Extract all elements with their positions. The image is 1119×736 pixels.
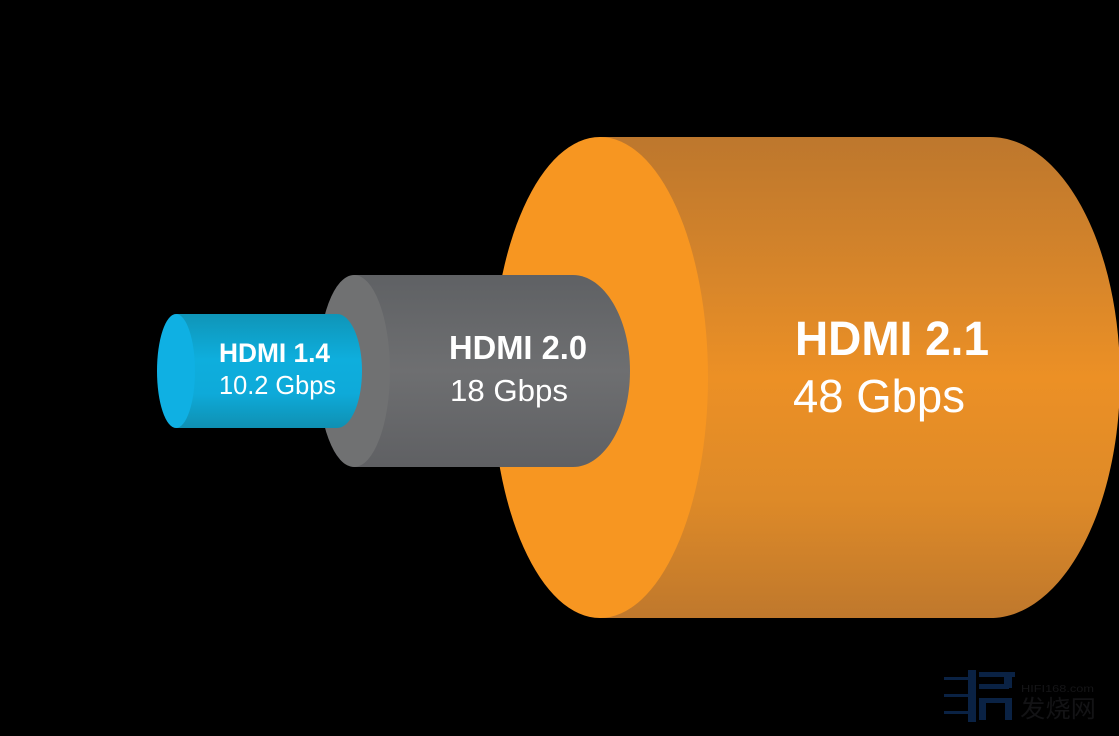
- cylinder: HDMI 1.4: [157, 314, 362, 428]
- label: 48 Gbps: 48 Gbps: [793, 370, 965, 422]
- label: HDMI 1.4: HDMI 1.4: [219, 338, 330, 368]
- label: HDMI 2.1: HDMI 2.1: [795, 313, 989, 366]
- cylinder: HDMI 2.1: [492, 137, 1119, 618]
- cylinder: HDMI 2.0: [318, 275, 630, 467]
- label: 10.2 Gbps: 10.2 Gbps: [219, 370, 336, 400]
- label: HDMI 2.0: HDMI 2.0: [449, 329, 587, 366]
- watermark text: [1020, 683, 1096, 723]
- watermark text: 发烧网: [1020, 696, 1096, 723]
- label: 18 Gbps: 18 Gbps: [450, 373, 568, 408]
- watermark text: HIFI168.com: [1021, 683, 1094, 695]
- watermark logo: [944, 670, 1015, 722]
